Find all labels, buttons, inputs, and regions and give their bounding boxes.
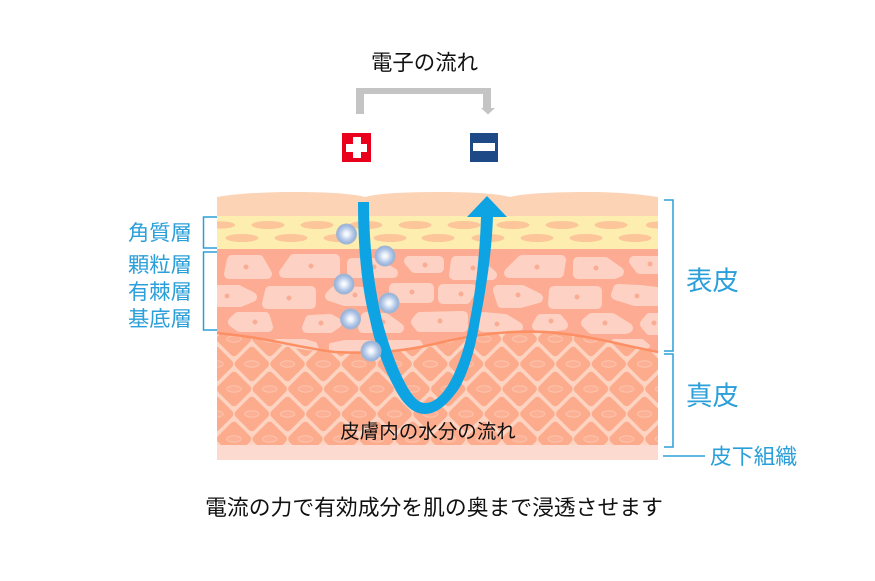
infographic canvas [128, 52, 796, 517]
cell nuclei [224, 262, 656, 326]
arrow: electron flow connector [356, 88, 495, 114]
label: flow inside skin: 皮膚内の水分の流れ [340, 421, 516, 443]
label: epidermis: 表皮 [686, 266, 739, 296]
epidermis cells [212, 259, 665, 350]
label: spinous layer: 有棘層 [128, 280, 192, 304]
subcutaneous tissue band [217, 445, 658, 460]
label: stratum corneum: 角質層 [128, 221, 192, 245]
label: granular layer: 顆粒層 [128, 253, 192, 277]
left layer labels [128, 221, 192, 331]
arrow: water flow through skin [358, 196, 507, 414]
stratum corneum surface [217, 192, 658, 217]
label: subcutaneous tissue: 皮下組織 [710, 444, 797, 469]
basement membrane line [217, 332, 658, 353]
label: basal layer: 基底層 [128, 307, 192, 331]
label: subcutaneous tissue [663, 444, 797, 469]
stratum corneum yellow layer [217, 216, 658, 249]
caption: 電流の力で有効成分を肌の奥まで浸透させます [205, 495, 663, 520]
right brackets [664, 200, 673, 447]
left brackets [204, 217, 217, 330]
skin cross-section [212, 192, 665, 460]
dermis layer [217, 320, 658, 445]
icon: plus electrode [342, 133, 371, 162]
title: electron flow: 電子の流れ [371, 51, 478, 75]
icon: minus electrode [470, 133, 498, 162]
epidermis layer [217, 249, 658, 353]
active ingredient particles [334, 224, 400, 362]
label: dermis: 真皮 [686, 381, 739, 411]
